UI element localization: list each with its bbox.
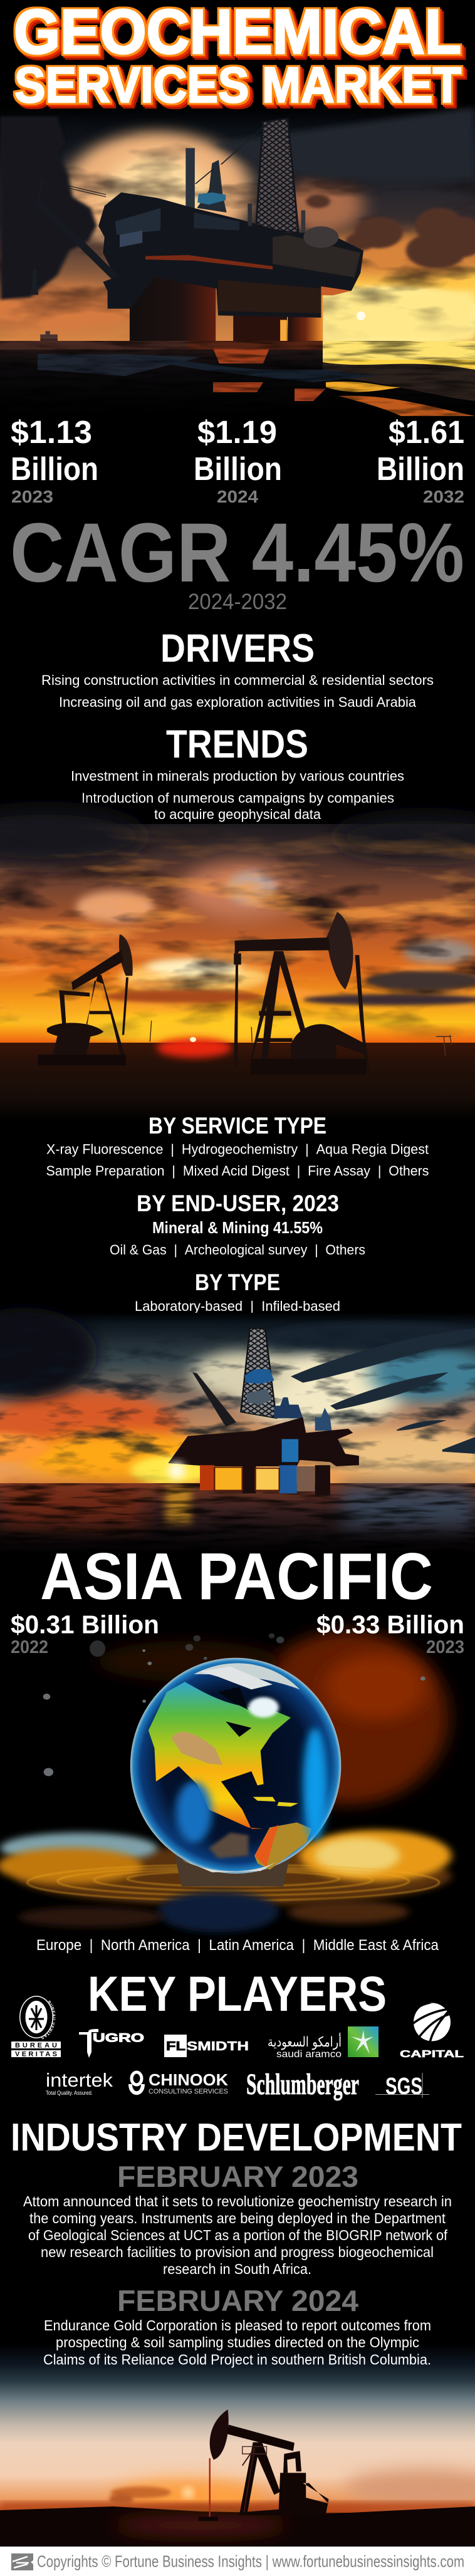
development: February 2024: Endurance Gold Corporation is pleased to report outcomes from <box>44 2317 431 2334</box>
logo: Bureau Veritas: VERITAS <box>15 2050 57 2058</box>
section: by type <box>135 1270 340 1314</box>
pump jack: right <box>234 912 370 1075</box>
logo: Saudi Aramco: saudi aramco <box>276 2049 342 2060</box>
platform <box>168 1328 359 1496</box>
development: February 2024: prospecting & soil sampling studies directed on the Olympic <box>56 2334 419 2350</box>
section: by end-user: Mineral & Mining 41.55% <box>152 1218 323 1237</box>
section: drivers: Rising construction activities in commercial & residential sectors <box>41 672 434 688</box>
logo: Schlumberger: Schlumberger <box>246 2068 359 2101</box>
region value 2022: $0.31 Billion <box>11 1610 159 1639</box>
region heading: ASIA PACIFIC <box>40 1540 433 1614</box>
ground <box>0 2506 475 2547</box>
background glow <box>248 1630 448 1805</box>
region value 2023 <box>316 1610 464 1657</box>
image: water-drop globe <box>0 1630 451 1932</box>
image: platform over the sea <box>0 1308 475 1555</box>
stat: 2024: 2024 <box>217 487 258 506</box>
logo: Intertek: intertek <box>46 2069 113 2091</box>
stat: 2032: Billion <box>377 451 464 488</box>
logo: SGS: SGS <box>385 2073 422 2100</box>
development: February 2023 <box>23 2160 452 2277</box>
droplets <box>43 1633 425 1776</box>
key players heading: KEY PLAYERS <box>88 1966 387 2021</box>
development: February 2024 <box>43 2284 431 2367</box>
storm clouds <box>0 107 475 300</box>
logo: Bureau Veritas: BUREAU VERITAS <box>41 2000 56 2039</box>
stat: 2032: 2032 <box>423 487 464 506</box>
tanker on horizon <box>40 331 58 343</box>
distant pylons <box>150 1021 451 1056</box>
section: by type: BY TYPE <box>195 1270 280 1295</box>
setting sun <box>190 1037 196 1042</box>
logo: FLSmidth: FL <box>166 2040 185 2053</box>
section: by service type: X-ray Fluorescence | Hydrogeochemistry | Aqua Regia Digest <box>46 1142 429 1157</box>
water <box>0 1483 475 1555</box>
image: pump jacks at sunset <box>0 808 475 1121</box>
section: trends: to acquire geophysical data <box>154 806 321 822</box>
sky glow <box>0 132 475 349</box>
development: February 2024: FEBRUARY 2024 <box>117 2284 358 2317</box>
sea <box>0 341 475 416</box>
crane <box>35 179 115 278</box>
pump jack: left <box>38 934 133 1065</box>
section: trends: Introduction of numerous campaigns by companies <box>81 790 394 806</box>
logo: FLSmidth: SMIDTH <box>187 2040 249 2053</box>
image: pump jack at dusk <box>0 2344 475 2547</box>
other regions: Europe | North America | Latin America | Middle East & Africa <box>36 1937 439 1954</box>
development: February 2023: FEBRUARY 2023 <box>117 2160 358 2193</box>
development: February 2024: Claims of its Reliance Gold Project in southern British Columbia. <box>43 2351 431 2367</box>
platform sun <box>168 1462 185 1479</box>
region value 2023: 2023 <box>426 1637 464 1657</box>
small cloud <box>109 2486 171 2505</box>
section: trends: Investment in minerals production by various countries <box>71 768 404 784</box>
region value 2022 <box>11 1610 159 1657</box>
pump jack silhouette <box>199 2409 328 2521</box>
logo: Capital <box>400 2003 464 2060</box>
footer <box>0 2547 475 2576</box>
logo: FLSmidth <box>164 2035 249 2057</box>
development: February 2023: the coming years. Instruments are being deployed in the Department <box>29 2210 446 2226</box>
image: offshore rig at dusk <box>0 107 475 416</box>
rig legs <box>130 273 323 342</box>
section: by end-user <box>110 1191 365 1258</box>
section: by end-user: BY END-USER, 2023 <box>137 1191 339 1216</box>
cloud streaks <box>291 1328 475 1454</box>
stat: 2032 <box>377 414 464 506</box>
sun <box>357 311 365 320</box>
development: February 2023: new research facilities to provision and progress biogeochemical <box>41 2244 434 2260</box>
development: February 2023: of Geological Sciences at UCT as a portion of the BIOGRIP network of <box>28 2227 448 2243</box>
ground <box>0 1043 475 1121</box>
section: drivers: Increasing oil and gas exploration activities in Saudi Arabia <box>59 694 416 710</box>
stat: 2023: Billion <box>11 451 98 488</box>
section: trends <box>71 722 404 822</box>
water ripples <box>0 1830 451 1932</box>
rig structure <box>30 118 363 342</box>
stat: 2023: $1.13 <box>11 414 92 450</box>
stat: 2024: $1.19 <box>197 414 277 450</box>
drop stem <box>174 1853 291 1886</box>
logo: Intertek: Total Quality. Assured. <box>46 2090 93 2097</box>
stat: 2023 <box>11 414 98 506</box>
logo: Chinook: CONSULTING SERVICES <box>149 2088 228 2095</box>
logo: Bureau Veritas: BUREAU <box>15 2042 57 2049</box>
derrick <box>256 118 298 232</box>
title <box>14 0 461 113</box>
logo: Bureau Veritas <box>11 1996 61 2058</box>
region value 2023: $0.33 Billion <box>316 1610 464 1639</box>
CAGR period: 2024-2032 <box>188 590 287 614</box>
section: by service type: Sample Preparation | Mixed Acid Digest | Fire Assay | Others <box>46 1163 429 1179</box>
stat: 2024: Billion <box>194 451 282 488</box>
section: trends: TRENDS <box>166 722 308 766</box>
section: drivers <box>41 627 434 710</box>
region value 2022: 2022 <box>11 1637 48 1657</box>
crane hook <box>30 269 38 295</box>
secondary tower <box>196 121 270 212</box>
logo: Chinook <box>130 2070 228 2095</box>
stat: 2024 <box>194 414 282 506</box>
globe sphere <box>130 1658 341 1874</box>
logo: Fugro: UGRO <box>93 2031 144 2045</box>
section: drivers: DRIVERS <box>160 627 315 670</box>
stat: 2023: 2023 <box>11 487 53 506</box>
logo: Fugro <box>79 2029 144 2058</box>
deck <box>98 192 363 318</box>
section: by end-user: Oil & Gas | Archeological survey | Others <box>110 1242 365 1258</box>
stat: 2032: $1.61 <box>389 414 464 450</box>
section: by service type <box>46 1113 429 1179</box>
development: February 2023: research in South Africa. <box>163 2261 311 2277</box>
logo: Capital: CAPITAL <box>400 2049 464 2060</box>
development: February 2023: Attom announced that it sets to revolutionize geochemistry research in <box>23 2193 452 2209</box>
logo: Saudi Aramco: أرامكو السعودية <box>268 2033 342 2050</box>
section: by type: Laboratory-based | Infiled-based <box>135 1298 340 1314</box>
logo: Chinook: CHINOOK <box>149 2070 228 2089</box>
footer logo <box>11 2553 33 2570</box>
logo: Saudi Aramco <box>268 2026 378 2060</box>
chimney <box>185 148 195 209</box>
section: by service type: BY SERVICE TYPE <box>149 1113 326 1139</box>
